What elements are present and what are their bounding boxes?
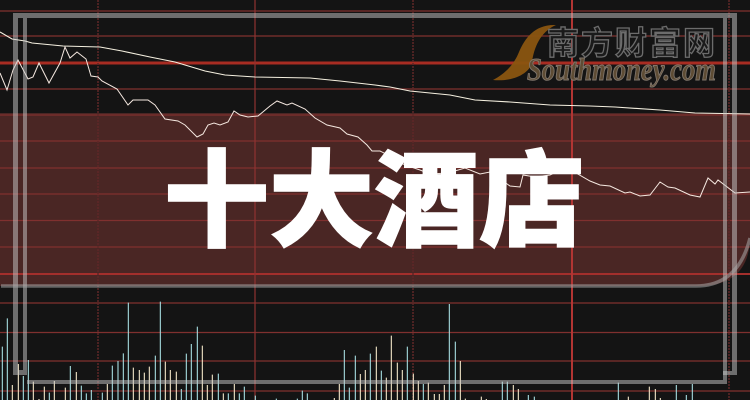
watermark Latin text: Southmoney.com [527,51,716,87]
price line [0,47,750,197]
moving average line [0,32,750,114]
volume bars right: cyan [381,304,692,400]
volume bars: cyan [2,302,370,400]
volume bars: cream [12,346,365,400]
title: 十大酒店 [164,144,584,261]
watermark Chinese text: 南方财富网 [547,25,715,61]
volume bars right: cream [376,336,660,400]
translucent title panel [0,113,750,286]
panel bottom outline [1,238,750,286]
watermark logo swoosh [493,25,556,80]
